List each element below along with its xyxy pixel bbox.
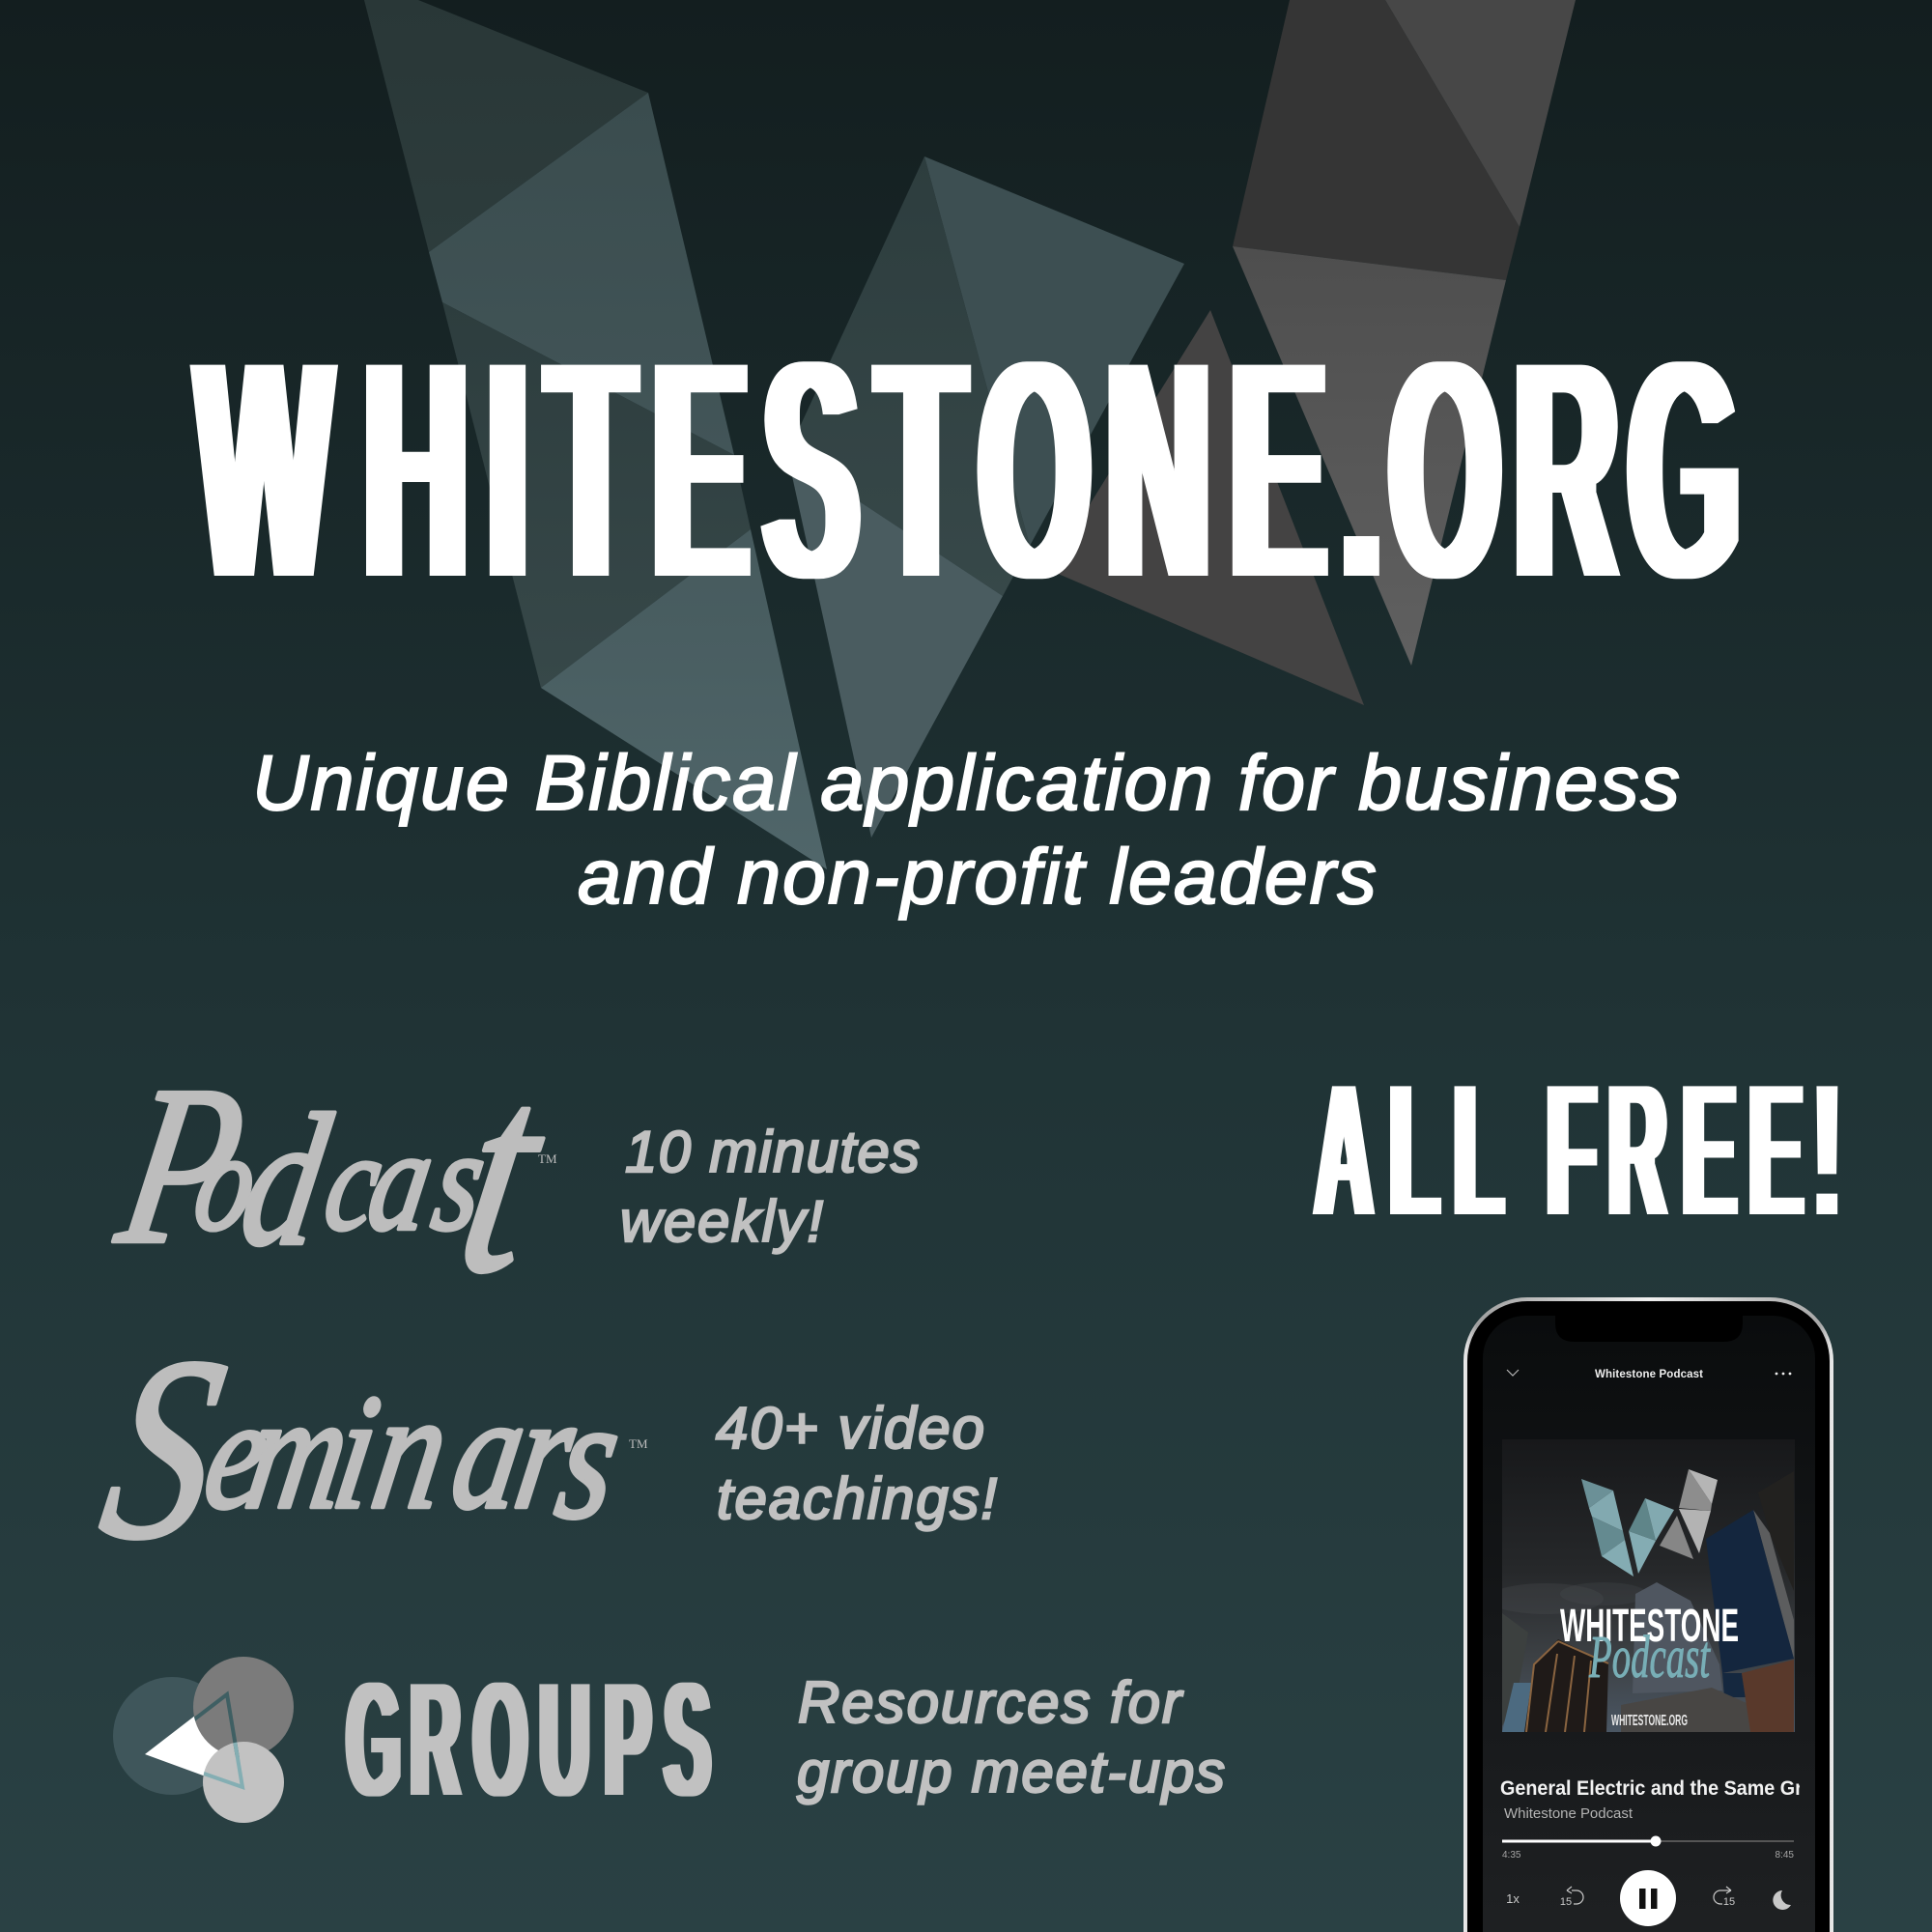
podcast description (620, 1120, 920, 1254)
player controls: 15 (1560, 1896, 1572, 1908)
phone mockup (1465, 1299, 1837, 1932)
progress bar: 4:35 (1502, 1850, 1521, 1861)
podcast description: 10 minutes (625, 1120, 920, 1184)
phone screen (1483, 1316, 1815, 1932)
player header (1507, 1369, 1791, 1378)
subtitle: and non-profit leaders (578, 834, 1377, 921)
seminars description: teachings! (717, 1466, 997, 1531)
seminars script logo: e (194, 1365, 281, 1542)
podcast script logo: d (229, 1075, 342, 1285)
cover logo (1581, 1469, 1718, 1577)
cover title: Podcast (1588, 1625, 1711, 1690)
all free callout: ALL FREE! (1315, 1041, 1840, 1259)
progress bar (1502, 1835, 1794, 1858)
seminars script logo: n (361, 1356, 462, 1544)
seminars description: 40+ video (716, 1396, 984, 1461)
podcast script logo: P (103, 1040, 260, 1291)
podcast cover art (1488, 1439, 1795, 1732)
seminars script logo: i (323, 1361, 391, 1543)
logo watermark: faceted W (364, 0, 1576, 869)
cover title (1560, 1601, 1739, 1729)
groups icon: overlapping circles and triangle (113, 1657, 294, 1823)
player header: Whitestone Podcast (1595, 1369, 1703, 1380)
seminars script logo: TM (629, 1436, 648, 1451)
seminars script logo: S (86, 1304, 242, 1593)
podcast script logo: TM (538, 1151, 557, 1166)
seminars script logo: s (546, 1361, 634, 1554)
player controls: 1x (1506, 1891, 1520, 1906)
notch (1555, 1314, 1743, 1342)
seminars script logo: m (236, 1361, 362, 1543)
groups heading: GROUPS (347, 1646, 710, 1832)
cover title: WHITESTONE (1560, 1601, 1739, 1652)
seminars description (716, 1396, 997, 1531)
seminars script logo (86, 1304, 648, 1593)
podcast description: weekly! (620, 1189, 823, 1254)
podcast script logo: s (423, 1100, 497, 1261)
cover title: WHITESTONE.ORG (1611, 1713, 1688, 1729)
show name: Whitestone Podcast (1504, 1805, 1634, 1822)
title: WHITESTONE.ORG (196, 293, 1740, 648)
groups description: group meet-ups (797, 1740, 1225, 1804)
groups description: Resources for (798, 1670, 1183, 1735)
seminars script logo: a (440, 1361, 539, 1543)
progress bar: 8:45 (1776, 1850, 1794, 1861)
phone body (1465, 1299, 1832, 1932)
podcast script logo: c (315, 1104, 392, 1260)
subtitle: Unique Biblical application for business (252, 740, 1680, 827)
subtitle (252, 740, 1680, 921)
player controls (1506, 1870, 1791, 1926)
groups description (797, 1670, 1225, 1804)
player controls: 15 (1723, 1896, 1735, 1908)
episode title: General Electric and the Same Group (1500, 1777, 1837, 1800)
podcast script logo (96, 1017, 568, 1332)
seminars script logo: r (504, 1361, 588, 1543)
podcast script logo: o (185, 1104, 269, 1260)
podcast script logo: a (358, 1100, 444, 1261)
podcast script logo: t (441, 1017, 568, 1332)
